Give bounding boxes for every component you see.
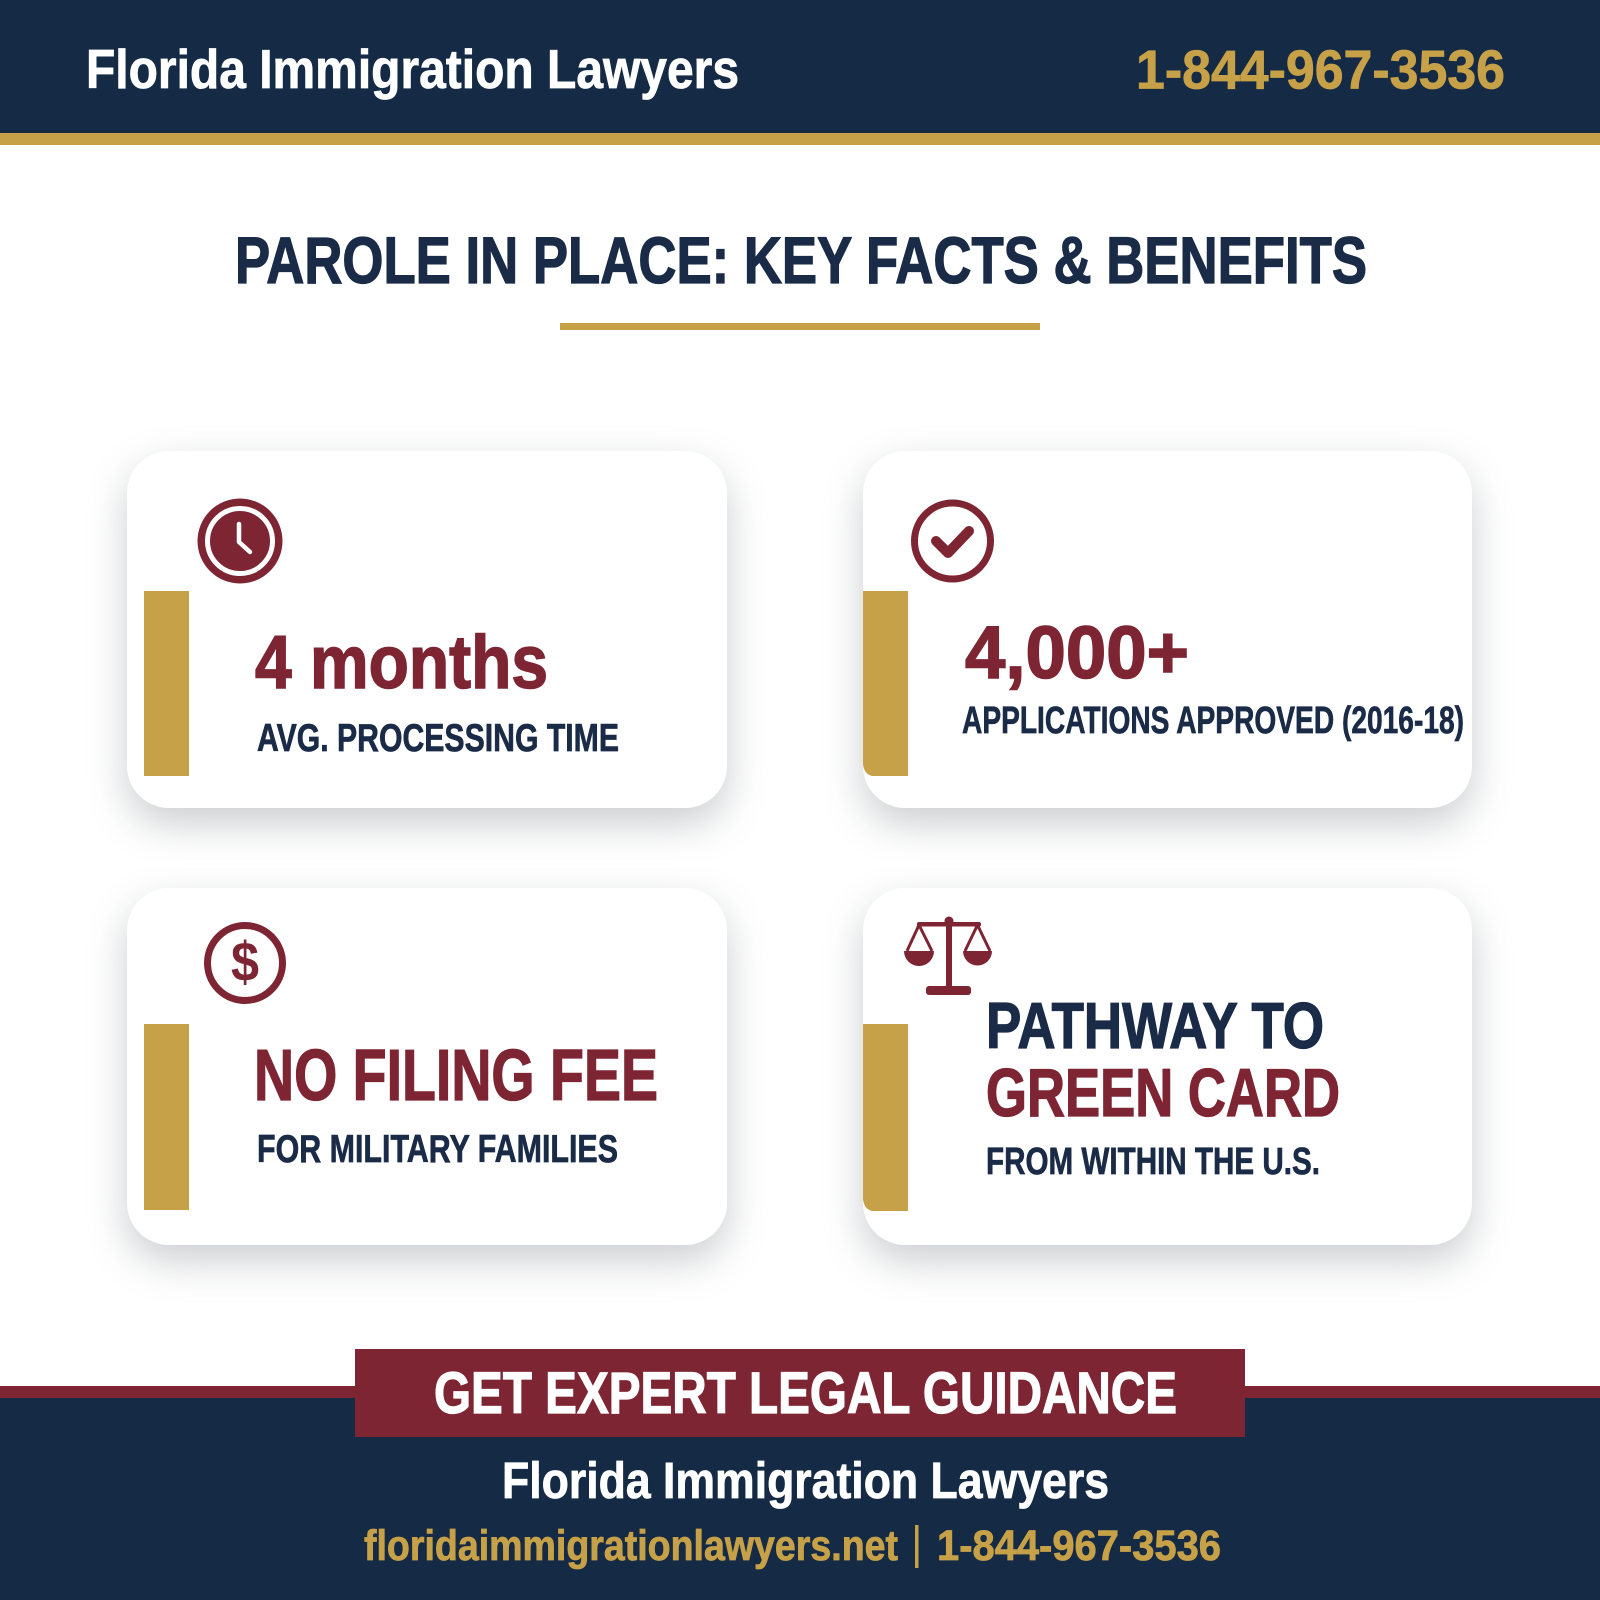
stat: 4,000+: 4,000+ [965,611,1189,694]
footer [0,1349,1600,1600]
label: for military families: FOR MILITARY FAMILIES [257,1128,618,1171]
panel: no filing fee [127,888,727,1245]
header phone number: 1-844-967-3536 [1136,38,1505,100]
panel: pathway to green card [863,888,1472,1245]
gold accent bar [863,1024,908,1211]
header firm name: Florida Immigration Lawyers [86,38,739,100]
icon: scales of justice [904,916,992,995]
stat: 4 months: 4 months [255,620,548,704]
icon: dollar sign: $ [231,930,259,993]
footer phone number: 1-844-967-3536 [937,1522,1221,1570]
icon: clock [198,498,282,584]
call to action banner [355,1349,1245,1437]
heading: green card: GREEN CARD [986,1055,1340,1131]
icon: dollar sign [208,926,282,1000]
label: from within the U.S.: FROM WITHIN THE U.S. [986,1141,1320,1183]
label: avg processing time: AVG. PROCESSING TIME [257,717,619,760]
header bar [0,0,1600,145]
gold accent bar [144,1024,189,1210]
footer website: floridaimmigrationlawyers.net [364,1522,898,1570]
heading: pathway to: PATHWAY TO [986,989,1324,1062]
call to action banner: GET EXPERT LEGAL GUIDANCE [434,1361,1177,1426]
stat: no filing fee: NO FILING FEE [254,1036,658,1116]
gold accent bar [863,591,908,776]
icon: check mark [914,503,990,579]
panel: applications approved [863,451,1472,808]
title [235,223,1367,330]
footer firm name: Florida Immigration Lawyers [502,1452,1109,1509]
panel: processing time [127,451,727,808]
gold accent bar [144,591,189,776]
